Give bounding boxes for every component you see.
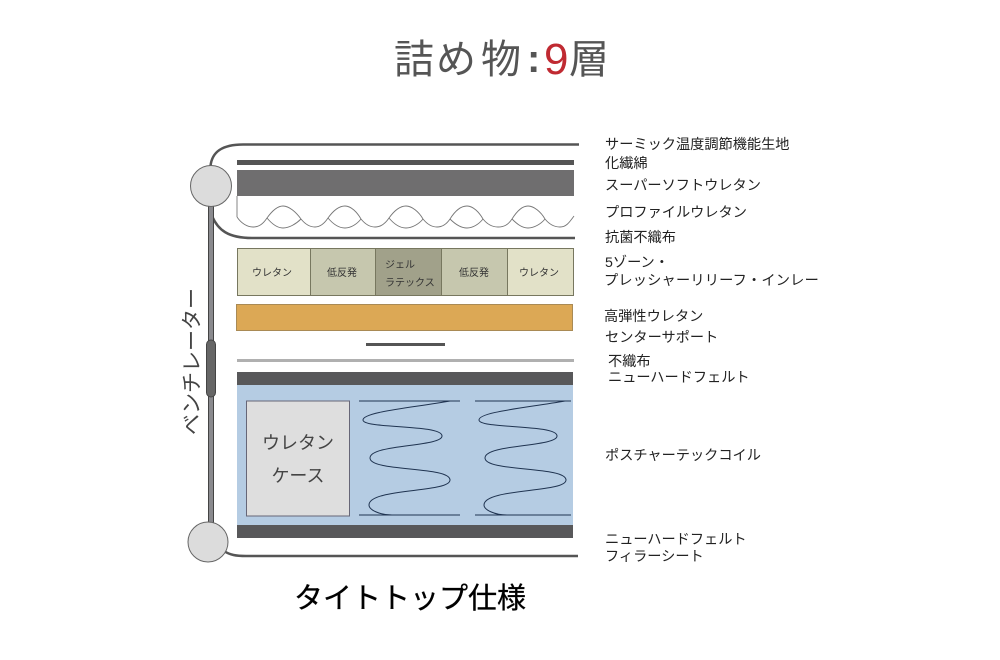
layer labels: 不織布 xyxy=(608,354,651,370)
five-zone pressure relief inlay xyxy=(238,248,574,296)
title xyxy=(394,35,609,84)
zone: urethane right: ウレタン xyxy=(519,267,559,279)
zone: gel latex: ジェル xyxy=(385,260,415,271)
ventilator label: ベンチレーター xyxy=(181,288,204,435)
urethane case: ウレタン xyxy=(262,433,334,453)
zone: low rebound right xyxy=(442,248,508,296)
layer labels: ニューハードフェルト xyxy=(608,370,750,386)
zone: low rebound right: 低反発 xyxy=(459,266,489,279)
blue pocket coil area xyxy=(237,385,573,525)
layer labels: 抗菌不織布 xyxy=(605,230,676,246)
high resilience urethane layer xyxy=(236,304,572,330)
layer labels: ポスチャーテックコイル xyxy=(605,448,761,464)
caption: タイトトップ仕様 xyxy=(294,582,526,615)
layer labels: 高弾性ウレタン xyxy=(604,308,703,325)
zone: gel latex: ラテックス xyxy=(385,277,435,289)
zone: low rebound left: 低反発 xyxy=(327,266,357,279)
ventilator pole xyxy=(208,205,214,525)
title: : xyxy=(527,37,540,81)
urethane case: ケース xyxy=(271,466,325,486)
zone: low rebound left xyxy=(310,248,376,296)
zone: urethane left xyxy=(238,248,310,296)
center support bar xyxy=(366,343,445,346)
mattress cross-section diagram xyxy=(188,144,579,562)
new hard felt top xyxy=(237,372,573,385)
title: 層 xyxy=(569,38,609,82)
layer labels: 化繊綿 xyxy=(605,156,648,172)
non-woven line xyxy=(237,359,574,362)
urethane case xyxy=(246,401,350,516)
zone: urethane left: ウレタン xyxy=(252,267,292,279)
top vent circle xyxy=(190,166,232,206)
layer labels: プロファイルウレタン xyxy=(605,205,747,221)
new hard felt bottom xyxy=(237,525,573,538)
profile urethane layer xyxy=(237,196,574,228)
bottom cover line xyxy=(224,551,578,556)
coil spring right xyxy=(475,401,571,515)
layer labels xyxy=(604,136,819,565)
thermic fabric layer xyxy=(237,160,574,165)
zone: urethane right xyxy=(508,248,574,296)
bottom vent circle xyxy=(188,522,228,562)
layer labels: センターサポート xyxy=(605,330,718,346)
ventilator handle xyxy=(206,340,216,397)
layer labels: スーパーソフトウレタン xyxy=(605,178,761,194)
zone: gel latex xyxy=(376,248,442,296)
super soft urethane layer xyxy=(237,170,574,196)
layer labels: 5ゾーン・ xyxy=(605,255,669,271)
coil spring left xyxy=(359,401,460,515)
layer labels: ニューハードフェルト xyxy=(605,532,747,548)
title: 9 xyxy=(544,35,568,84)
layer labels: サーミック温度調節機能生地 xyxy=(605,136,789,153)
top cover outline xyxy=(210,144,579,238)
layer labels: フィラーシート xyxy=(605,549,704,565)
layer labels: プレッシャーリリーフ・インレー xyxy=(604,273,819,289)
title: 詰め物 xyxy=(394,38,521,82)
